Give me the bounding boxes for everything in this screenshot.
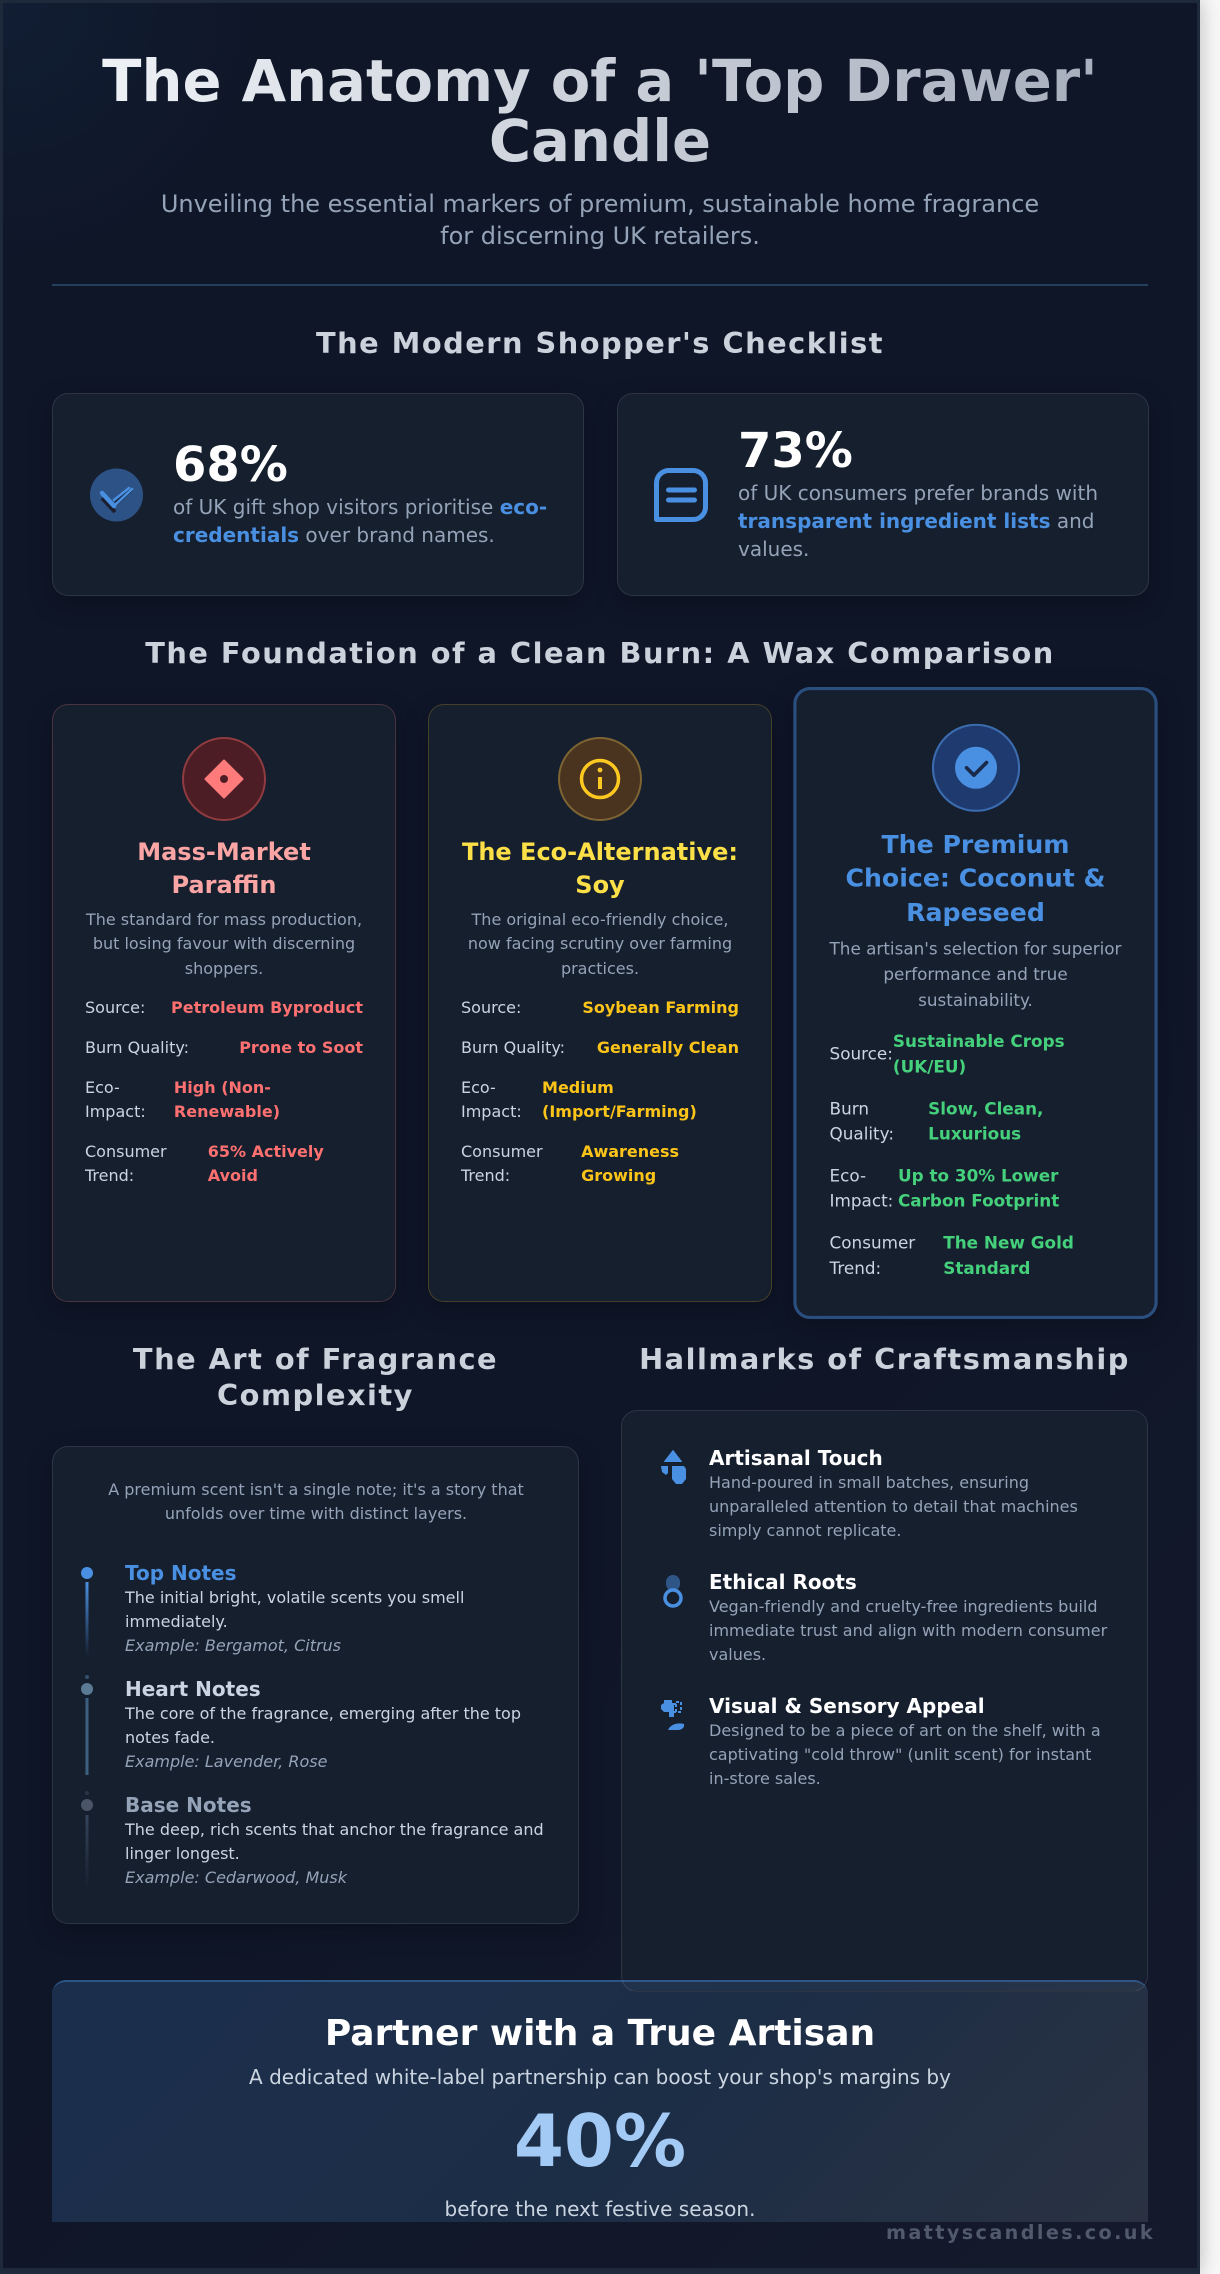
icon: visual and sensory appeal [661,1700,684,1730]
card description: The artisan's selection for superior performance and true sustainability. [830,938,1121,1009]
spec: consumer trend: The New Gold Standard [943,1232,1074,1277]
spec: burn quality: Slow, Clean, Luxurious [928,1098,1043,1143]
card title: Mass-Market Paraffin [137,838,311,898]
icon: double check [90,468,143,522]
heading: hallmarks: Hallmarks of Craftsmanship [639,1342,1130,1376]
stat text: of UK consumers prefer brands with transparent ingredient lists and values. [738,481,1098,561]
note: base notes: Base Notes [125,1793,252,1817]
icon: ethical roots [663,1575,683,1608]
item: artisanal touch: Hand-poured in small batches, ensuring unparalleled attention to detail that machines simply cannot replicate. [709,1473,1078,1540]
spec: consumer trend [829,1232,1074,1277]
spec: burn quality [85,1038,363,1057]
item: visual and sensory appeal: Visual & Sensory Appeal [709,1694,985,1718]
panel: soy [428,704,772,1302]
spec: source: Source: [85,998,145,1017]
note: base notes: The deep, rich scents that anchor the fragrance and linger longest. [125,1820,544,1863]
spec: consumer trend: 65% Actively Avoid [208,1142,324,1185]
spec: eco-impact: Eco-Impact: [830,1165,893,1210]
spec: eco-impact: High (Non-Renewable) [174,1078,280,1121]
heading: wax comparison: The Foundation of a Clean Burn: A Wax Comparison [145,636,1055,670]
note: top notes: Top Notes [125,1561,237,1585]
spec: source [461,998,739,1017]
cta closing text: before the next festive season. [445,2197,755,2221]
intro text: A premium scent isn't a single note; it's a story that unfolds over time with distinct layers. [108,1480,524,1523]
note: heart notes: Example: Lavender, Rose [125,1752,327,1771]
spec: source: Sustainable Crops (UK/EU) [893,1031,1065,1076]
timeline: heart notes [81,1675,93,1775]
item: artisanal touch: Artisanal Touch [709,1446,883,1470]
spec: burn quality: Burn Quality: [461,1038,565,1057]
cta figure: 40% [514,2099,686,2183]
card title: The Premium Choice: Coconut & Rapeseed [845,829,1106,926]
icon: red diamond [182,737,266,821]
icon: blue check [932,724,1020,812]
note: heart notes [124,1677,521,1771]
timeline: base notes [81,1791,93,1876]
stat text: of UK gift shop visitors prioritise eco-credentials over brand names. [173,495,547,547]
spec: burn quality: Burn Quality: [830,1098,894,1143]
call to action banner [52,1980,1148,2222]
subtitle: for discerning UK retailers. [440,222,760,250]
icon: artisanal touch [661,1450,686,1484]
spec: consumer trend: Consumer Trend: [85,1142,167,1185]
spec: eco-impact: Up to 30% Lower Carbon Footprint [898,1165,1059,1210]
panel: hallmarks [621,1410,1148,1992]
watermark: mattyscandles.co.uk [886,2221,1155,2244]
stat card: 68% [52,393,584,596]
spec: burn quality: Burn Quality: [85,1038,189,1057]
panel: fragrance notes [52,1446,579,1924]
item: ethical roots: Ethical Roots [709,1570,857,1594]
icon: yellow info [558,737,642,821]
stat text [173,437,547,547]
spec: source: Source: [830,1043,893,1063]
title [52,52,1148,172]
spec: burn quality [830,1098,1043,1143]
spec: source [85,998,363,1017]
spec: eco-impact [461,1078,697,1121]
card description: The standard for mass production, but losing favour with discerning shoppers. [86,910,362,978]
spec: source: Source: [461,998,521,1017]
note: heart notes: The core of the fragrance, emerging after the top notes fade. [125,1704,521,1747]
title: Candle [489,108,711,175]
note: base notes: Example: Cedarwood, Musk [125,1868,347,1887]
spec: burn quality: Prone to Soot [239,1038,363,1057]
item: ethical roots: Vegan-friendly and cruelty-free ingredients build immediate trust and align with modern consumer values. [709,1597,1107,1664]
card description: The original eco-friendly choice, now facing scrutiny over farming practices. [468,910,732,978]
title: The Anatomy of a 'Top Drawer' [102,48,1098,115]
spec: consumer trend: Awareness Growing [581,1142,679,1185]
spec: consumer trend [460,1142,679,1185]
icon: document bubble [654,468,708,522]
spec: consumer trend [84,1142,324,1185]
spec: burn quality: Generally Clean [597,1038,739,1057]
stat text: 68% [173,437,288,493]
spec: burn quality [461,1038,739,1057]
item: visual and sensory appeal: Designed to be a piece of art on the shelf, with a captivating "cold throw" (unlit scent) for instant in-store sales. [709,1721,1101,1788]
heading: fragrance complexity: The Art of Fragrance Complexity [133,1342,498,1412]
spec: eco-impact: Medium (Import/Farming) [542,1078,697,1121]
spec: source: Petroleum Byproduct [171,998,363,1017]
note: top notes [124,1561,464,1655]
note: heart notes: Heart Notes [125,1677,261,1701]
spec: eco-impact: Eco-Impact: [461,1078,522,1121]
heading: checklist: The Modern Shopper's Checklist [316,326,884,360]
note: top notes: The initial bright, volatile scents you smell immediately. [125,1588,464,1631]
subtitle [161,190,1039,250]
stat text: 73% [738,423,853,479]
note: top notes: Example: Bergamot, Citrus [125,1636,341,1655]
subtitle: Unveiling the essential markers of premium, sustainable home fragrance [161,190,1039,218]
timeline: top notes [81,1567,93,1654]
spec: consumer trend: Consumer Trend: [830,1232,915,1277]
card title: The Eco-Alternative: Soy [462,838,738,898]
spec: eco-impact: Eco-Impact: [85,1078,146,1121]
panel: premium coconut and rapeseed [793,686,1158,1319]
cta heading: Partner with a True Artisan [325,2013,875,2054]
spec: eco-impact [85,1078,280,1121]
panel: paraffin [52,704,396,1302]
stat text [738,423,1098,561]
spec: consumer trend: Consumer Trend: [461,1142,543,1185]
stat card: 73% [617,393,1149,596]
note: base notes [124,1793,544,1887]
spec: source: Soybean Farming [582,998,739,1017]
cta text: A dedicated white-label partnership can boost your shop's margins by [249,2065,951,2089]
